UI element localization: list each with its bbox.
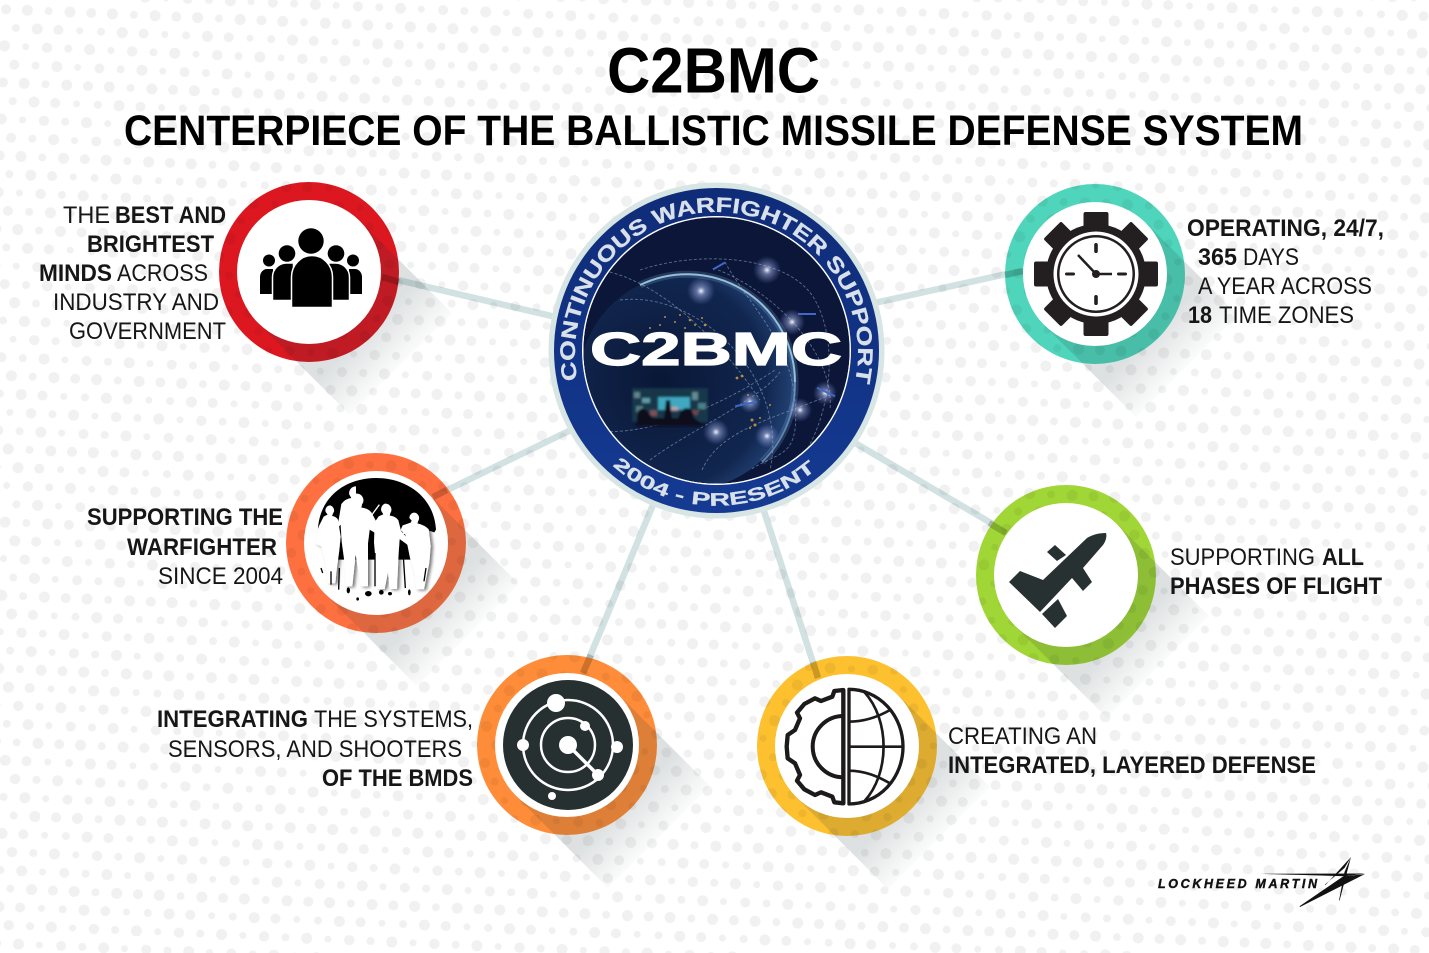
text: phases of flight (1170, 544, 1382, 600)
logo: Lockheed Martin: LOCKHEED MARTIN (1158, 877, 1318, 891)
emblem curved text: 2004 - PRESENT (612, 458, 812, 506)
text: best and brightest (39, 202, 226, 345)
text: best and brightest: MINDS (39, 260, 112, 287)
icon: radar (495, 673, 639, 817)
icon: soldiers (304, 471, 448, 615)
text: layered defense: INTEGRATED, LAYERED DEFENSE (948, 752, 1316, 779)
text: best and brightest: BRIGHTEST (87, 231, 214, 258)
text: best and brightest: BEST AND (115, 202, 226, 229)
badge ring: orange-red (286, 453, 519, 686)
emblem control room scene (632, 388, 708, 426)
text: operating 24/7: 18 (1188, 302, 1212, 329)
text: integrating systems: OF THE BMDS (322, 765, 473, 792)
text: operating 24/7 (1187, 215, 1384, 329)
text: integrating systems: INTEGRATING (157, 706, 308, 733)
text: integrating systems: THE SYSTEMS, (314, 706, 473, 733)
emblem curved text: CONTINUOUS WARFIGHTER SUPPORT (560, 197, 873, 385)
badge ring: orange (477, 655, 710, 888)
text: integrating systems: SENSORS, AND SHOOTERS (168, 736, 462, 763)
text: phases of flight: PHASES OF FLIGHT (1170, 573, 1382, 600)
emblem globe and orbits (579, 215, 850, 490)
badge ring: red (219, 182, 452, 415)
text: best and brightest: INDUSTRY AND (53, 289, 219, 316)
text: supporting the warfighter (87, 504, 283, 590)
badge ring: teal (1005, 184, 1238, 417)
text: best and brightest: ACROSS (117, 260, 208, 287)
icon: missile (994, 503, 1138, 647)
text: integrating systems (157, 706, 473, 792)
title: C2BMC (607, 34, 820, 106)
text: layered defense (948, 723, 1316, 779)
text: phases of flight: SUPPORTING (1170, 544, 1315, 571)
text: operating 24/7: TIME ZONES (1219, 302, 1354, 329)
emblem wordmark: C2BMC (590, 323, 842, 375)
text: supporting the warfighter: SINCE 2004 (158, 563, 283, 590)
text: operating 24/7: DAYS (1243, 244, 1299, 271)
icon: gear and globe (775, 674, 919, 818)
emblem curved text (560, 197, 873, 506)
badge ring: yellow (757, 656, 990, 889)
subtitle: CENTERPIECE OF THE BALLISTIC MISSILE DEFENSE SYSTEM (124, 107, 1303, 155)
text: best and brightest: GOVERNMENT (69, 318, 226, 345)
logo: Lockheed Martin (1158, 857, 1365, 907)
text: supporting the warfighter: WARFIGHTER (127, 534, 277, 561)
icon: people (237, 200, 381, 344)
text: phases of flight: ALL (1322, 544, 1364, 571)
center emblem (548, 182, 884, 518)
icon: gear clock (1023, 202, 1167, 346)
text: operating 24/7: A YEAR ACROSS (1198, 273, 1372, 300)
text: operating 24/7: 365 (1198, 244, 1237, 271)
badge ring: green (976, 485, 1209, 718)
text: operating 24/7: OPERATING, 24/7, (1187, 215, 1384, 242)
text: layered defense: CREATING AN (948, 723, 1097, 750)
connector lines (385, 271, 1020, 678)
text: best and brightest: THE (63, 202, 110, 229)
text: supporting the warfighter: SUPPORTING THE (87, 504, 283, 531)
